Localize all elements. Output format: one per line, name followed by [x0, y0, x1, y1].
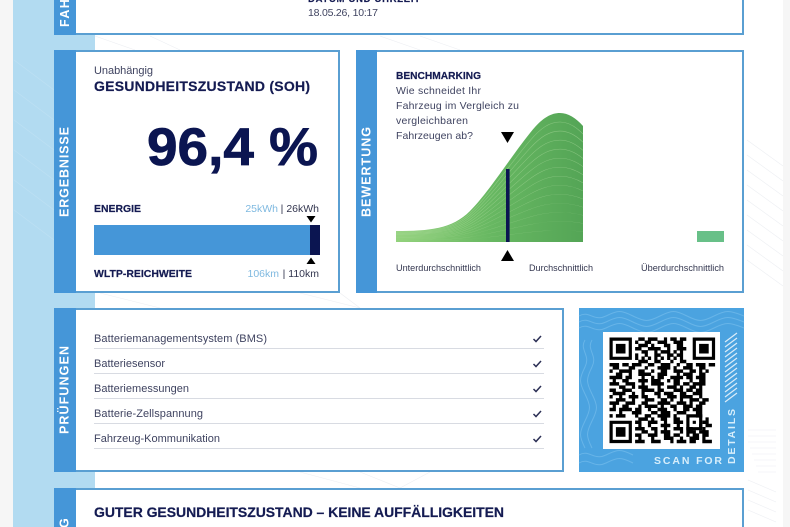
sidebar label: Bewertung: BEWERTUNG — [360, 127, 374, 217]
values: energy — [245, 203, 319, 215]
label: Energie: ENERGIE — [94, 204, 141, 215]
label: WLTP-Reichweite: WLTP-REICHWEITE — [94, 269, 192, 280]
question text: Fahrzeug im Vergleich zu — [396, 100, 519, 112]
values: range: | 110km — [283, 268, 319, 280]
panel: Prüfungen — [54, 308, 563, 472]
check row: BMS — [94, 333, 544, 349]
values: energy: 25kWh — [245, 203, 278, 215]
icon: QR code — [610, 338, 715, 443]
chart: benchmarking curve — [396, 113, 583, 242]
values: energy: | 26kWh — [281, 203, 319, 215]
label: details: DETAILS — [726, 409, 738, 464]
icon: top marker — [501, 132, 514, 143]
check row: cell voltage: Batterie-Zellspannung — [94, 408, 203, 420]
date and time value: 18.05.26, 10:17 — [308, 7, 378, 19]
axis labels: Durchschnittlich — [529, 263, 593, 274]
heading: Benchmarking: BENCHMARKING — [396, 70, 481, 82]
QR white background — [603, 332, 720, 449]
check row: sensor — [94, 358, 544, 374]
check row: communication — [94, 433, 544, 449]
value: 96,4 %: 96,4 % — [147, 118, 318, 177]
icon: top marker — [306, 216, 316, 222]
values: range: 106km — [247, 268, 279, 280]
values: range — [247, 268, 319, 280]
icon: bottom marker — [501, 250, 514, 261]
decorative stripes — [725, 333, 737, 402]
question text: Fahrzeugen ab? — [396, 130, 473, 142]
question text — [396, 85, 519, 142]
panel: QR code card — [579, 308, 744, 472]
sidebar label: Ergebnisse: ERGEBNISSE — [58, 127, 72, 217]
heading: Gesundheitszustand: GESUNDHEITSZUSTAND (SOH) — [94, 78, 310, 94]
legend swatch: above average — [697, 231, 724, 242]
question text: Wie schneidet Ihr — [396, 85, 482, 97]
icon: bottom marker — [306, 258, 316, 264]
eyebrow: Unabhängig: Unabhängig — [94, 65, 153, 77]
check row: BMS: Batteriemanagementsystem (BMS) — [94, 333, 267, 345]
check row: measurements — [94, 383, 544, 399]
axis labels — [396, 263, 724, 274]
panel: Fahrzeug — [54, 0, 743, 35]
question text: vergleichbaren — [396, 115, 468, 127]
label: scan for: SCAN FOR — [654, 455, 722, 467]
heading: result summary: GUTER GESUNDHEITSZUSTAND – KEINE AUFFÄLLIGKEITEN — [94, 504, 504, 520]
check row: cell voltage — [94, 408, 544, 424]
panel: Ergebnisse — [54, 50, 339, 293]
panel: Zusammenfassung — [54, 488, 743, 527]
axis labels: Unterdurchschnittlich — [396, 263, 481, 274]
check row: communication: Fahrzeug-Kommunikation — [94, 433, 220, 445]
check row: sensor: Batteriesensor — [94, 358, 165, 370]
panel: Bewertung — [356, 50, 743, 293]
bar: energy and range — [94, 225, 320, 255]
sidebar label: Prüfungen: PRÜFUNGEN — [56, 346, 72, 434]
marker bar — [506, 169, 510, 242]
check row: measurements: Batteriemessungen — [94, 383, 189, 395]
axis labels: Überdurchschnittlich — [641, 263, 724, 274]
